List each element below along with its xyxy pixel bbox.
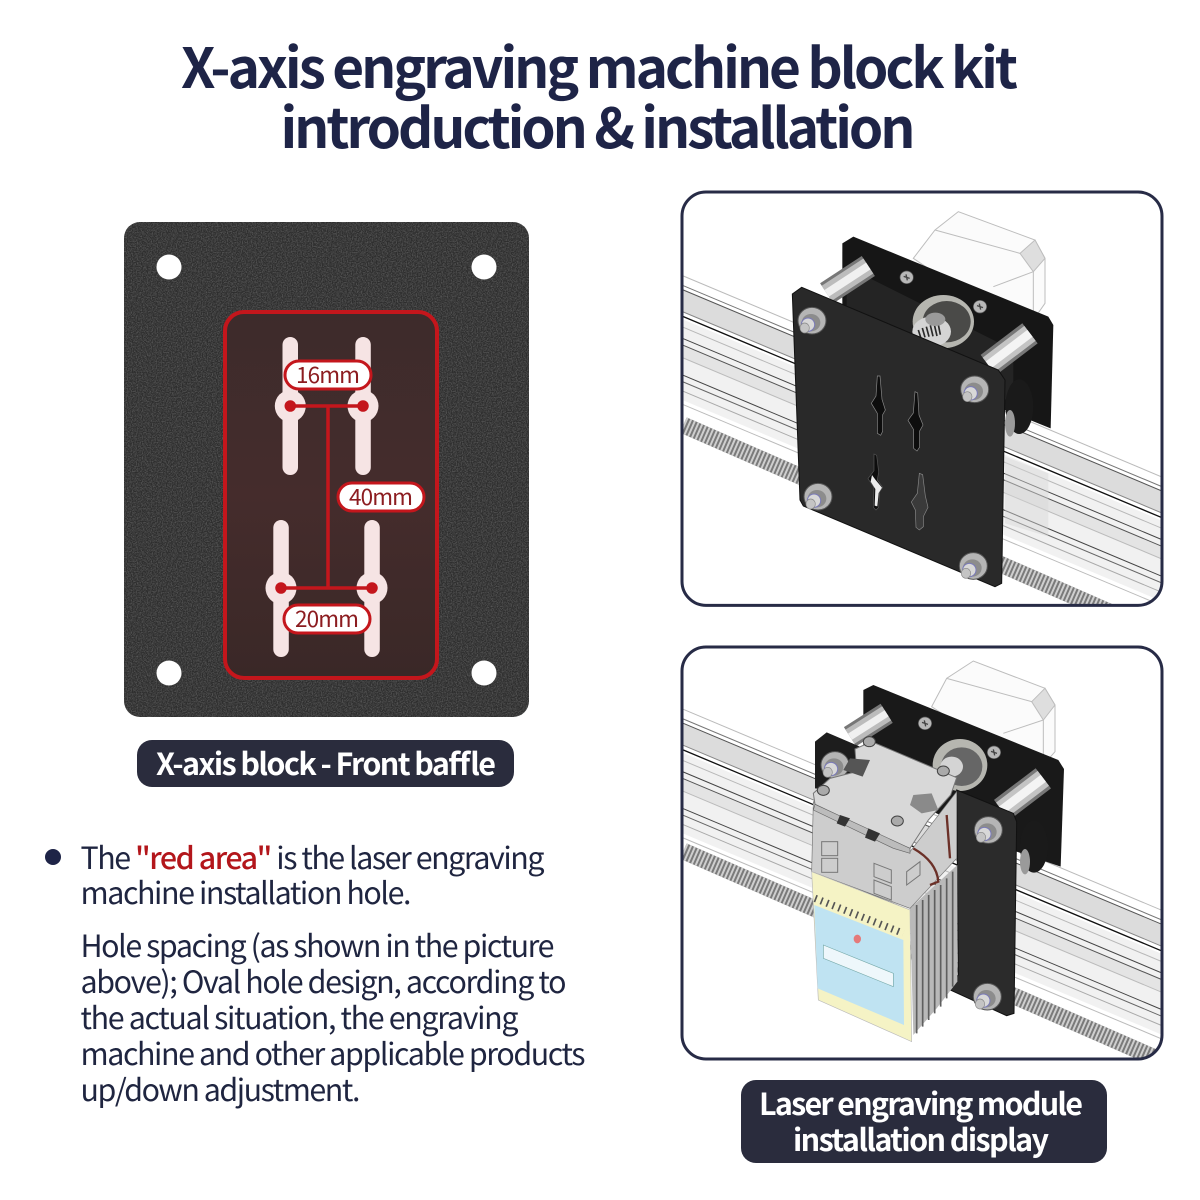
- title: [181, 24, 1018, 164]
- threaded rod: [684, 417, 1112, 604]
- caption: front baffle: X-axis block - Front baffle: [156, 740, 496, 784]
- text block: description: machine and other applicable products: [80, 1030, 586, 1074]
- text block: description: [80, 834, 586, 1110]
- text block: description: above); Oval hole design, according to: [80, 958, 566, 1002]
- motor: [932, 661, 1055, 765]
- red area: [225, 312, 437, 678]
- panel border: [682, 192, 1162, 605]
- caption: laser module display: Laser engraving module: [759, 1080, 1083, 1124]
- text block: description: up/down adjustment.: [80, 1066, 360, 1110]
- panel: front baffle plate: [124, 222, 529, 717]
- oval slots: [266, 337, 388, 657]
- motor: [913, 212, 1048, 537]
- screws: [900, 271, 913, 284]
- rear plate: [863, 685, 1064, 867]
- text block: description: Hole spacing (as shown in the picture: [80, 922, 554, 966]
- front plate strip: [947, 790, 1017, 1016]
- heatsink: [910, 865, 957, 1035]
- panel: block assembly photo: [680, 190, 1170, 628]
- top plate: [813, 742, 957, 848]
- bolts: [798, 307, 826, 334]
- aluminium rail: [683, 709, 1167, 1041]
- standoff rods: [827, 266, 1030, 365]
- label: 20mm: 20mm: [295, 602, 359, 634]
- dimension lines: [277, 402, 376, 592]
- aluminium rail: [683, 276, 1167, 608]
- text block: description: machine installation hole.: [80, 869, 412, 913]
- rail wheel: [1020, 849, 1046, 874]
- text block: description: The "red area" is the laser engraving: [80, 834, 544, 878]
- caption: laser module display: installation display: [793, 1116, 1049, 1160]
- label: 16mm: 16mm: [296, 358, 360, 390]
- panel: laser module installation photo: [680, 645, 1170, 1065]
- pulley: [912, 295, 974, 348]
- caption: laser module display: [741, 1080, 1107, 1163]
- rear plate: [842, 237, 1053, 428]
- standoff rods: [850, 713, 1043, 810]
- front plate corner: [815, 732, 860, 792]
- mounting holes: [156, 254, 496, 686]
- housing: [812, 792, 957, 908]
- label: 40mm: 40mm: [349, 480, 413, 512]
- rail wheel: [1005, 382, 1032, 437]
- text block: description: the actual situation, the engraving: [80, 994, 518, 1038]
- title: introduction & installation: [280, 84, 916, 164]
- threaded rod: [683, 851, 1160, 1060]
- wiring: [913, 815, 950, 885]
- slots: [868, 376, 928, 530]
- plate body: [124, 222, 529, 717]
- panel border: [682, 647, 1162, 1059]
- screws: [918, 717, 932, 730]
- bullet: [45, 849, 61, 865]
- label sticker: [812, 872, 912, 1042]
- bolts: [821, 752, 849, 778]
- front plate: [792, 287, 1005, 587]
- title: X-axis engraving machine block kit: [181, 24, 1018, 104]
- laser module: [812, 737, 957, 1042]
- pulley: [933, 739, 987, 791]
